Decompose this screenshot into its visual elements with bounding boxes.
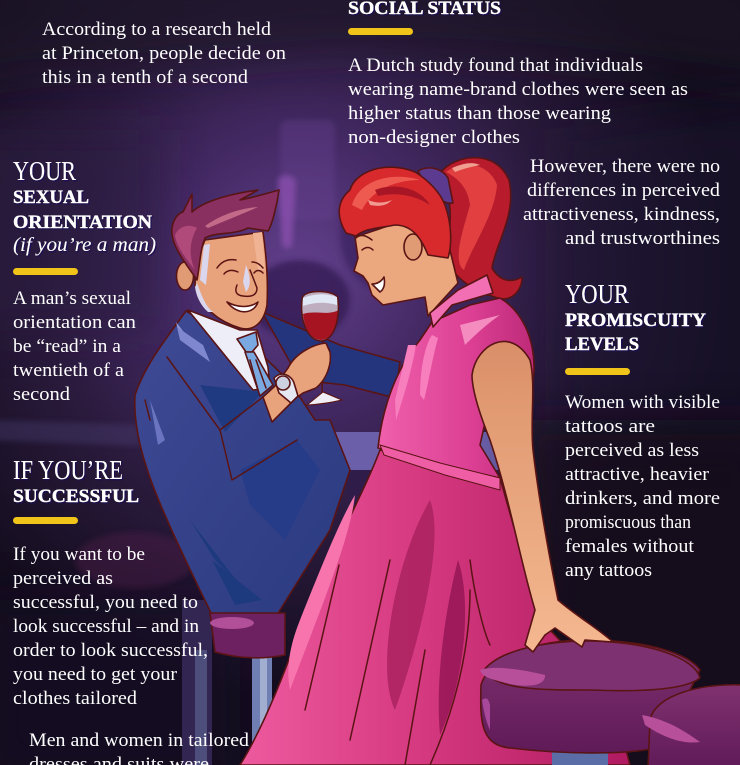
foreground stools bbox=[480, 640, 740, 765]
text: men and women in tailored dresses: Men and women in tailored bbox=[29, 730, 250, 751]
woman's hair front bbox=[339, 167, 451, 258]
text: tailored clothes: order to look successful, bbox=[13, 640, 208, 661]
text: tattoos: perceived as less bbox=[565, 440, 699, 461]
heading: if you're successful: SUCCESSFUL bbox=[13, 486, 139, 507]
text: tattoos bbox=[565, 392, 720, 581]
heading: your promiscuity levels: YOUR bbox=[565, 279, 629, 309]
text: tailored clothes: successful, you need to bbox=[13, 592, 198, 613]
wristwatch bbox=[274, 374, 298, 403]
heading: your sexual orientation bbox=[13, 156, 156, 256]
text: tattoos: any tattoos bbox=[565, 560, 652, 581]
left foreground stool seat bbox=[210, 613, 285, 658]
text: no differences in attractiveness: differences in perceived bbox=[527, 180, 721, 201]
man's hair bbox=[172, 190, 279, 280]
hair band bbox=[418, 168, 453, 203]
skirt folds and shading bbox=[288, 495, 490, 765]
second stool, right edge bbox=[642, 685, 740, 765]
text: no differences in attractiveness: attractiveness, kindness, bbox=[523, 204, 720, 225]
illustration: woman in pink dress bbox=[240, 158, 630, 765]
heading: if you're successful bbox=[13, 455, 139, 507]
text: research at Princeton: at Princeton, people decide on bbox=[42, 43, 287, 64]
heading: your promiscuity levels: LEVELS bbox=[565, 334, 639, 355]
wine glass bbox=[302, 291, 342, 405]
illustration: man with wine glass bbox=[135, 190, 400, 618]
woman's dress bodice bbox=[378, 298, 534, 478]
text: sexual orientation read bbox=[13, 288, 137, 405]
heading: your sexual orientation: YOUR bbox=[13, 156, 76, 186]
hair highlights bbox=[175, 207, 258, 270]
text: research at Princeton bbox=[42, 19, 287, 88]
text: Dutch study: A Dutch study found that individuals bbox=[348, 55, 643, 76]
woman's skirt bbox=[240, 450, 630, 765]
text: sexual orientation read: A man’s sexual bbox=[13, 288, 131, 309]
main stool bbox=[480, 640, 700, 765]
man's hand and forearm bbox=[263, 343, 330, 422]
woman's neck and face bbox=[354, 222, 458, 316]
man's neck and face bbox=[195, 232, 267, 329]
text: tattoos: tattoos are bbox=[565, 416, 655, 437]
text: sexual orientation read: orientation can bbox=[13, 312, 137, 333]
text: sexual orientation read: twentieth of a bbox=[13, 360, 125, 381]
hair highlights bbox=[352, 177, 430, 210]
text: Dutch study: higher status than those wearing bbox=[348, 103, 612, 124]
text: tattoos: drinkers, and more bbox=[565, 488, 720, 509]
heading: your promiscuity levels: PROMISCUITY bbox=[565, 310, 706, 331]
shirt bbox=[188, 310, 270, 390]
cheek highlights bbox=[195, 232, 265, 312]
text: sexual orientation read: be “read” in a bbox=[13, 336, 122, 357]
text: Dutch study: non-designer clothes bbox=[348, 127, 520, 148]
text: no differences in attractiveness: However, there were no bbox=[530, 156, 720, 177]
text: research at Princeton: this in a tenth of a second bbox=[42, 67, 249, 88]
text: Dutch study bbox=[348, 55, 688, 148]
text: tattoos: attractive, heavier bbox=[565, 464, 710, 485]
heading: your promiscuity levels bbox=[565, 279, 706, 355]
text: tailored clothes bbox=[13, 544, 208, 709]
jacket shading and folds bbox=[145, 322, 320, 605]
text: men and women in tailored dresses bbox=[29, 730, 250, 765]
heading: your sexual orientation: ORIENTATION bbox=[13, 212, 152, 233]
woman's face details bbox=[356, 234, 422, 292]
ponytail highlights bbox=[446, 163, 497, 270]
heading: if you're successful: IF YOU’RE bbox=[13, 455, 123, 485]
necktie bbox=[237, 332, 273, 396]
bodice highlights bbox=[380, 315, 500, 490]
woman's collar bbox=[430, 275, 493, 327]
text: tattoos: Women with visible bbox=[565, 392, 720, 413]
man's ear bbox=[176, 262, 194, 290]
heading: your sexual orientation: SEXUAL bbox=[13, 187, 89, 208]
text: tattoos: promiscuous than bbox=[565, 512, 691, 533]
text: no differences in attractiveness: and trustworthines bbox=[565, 228, 720, 249]
ponytail bbox=[441, 158, 522, 299]
text: Dutch study: wearing name-brand clothes were seen as bbox=[348, 79, 688, 100]
man's eyes, nose and smile bbox=[217, 260, 263, 312]
man's suit jacket bbox=[135, 311, 350, 618]
yellow divider: sexual orientation bbox=[13, 268, 78, 275]
text: research at Princeton: According to a research held bbox=[42, 19, 272, 40]
yellow divider: successful bbox=[13, 517, 78, 524]
yellow divider: promiscuity bbox=[565, 368, 630, 375]
yellow divider: social status bbox=[348, 28, 413, 35]
text: tailored clothes: If you want to be bbox=[13, 544, 145, 565]
text: no differences in attractiveness bbox=[523, 156, 721, 249]
text: tailored clothes: look successful – and in bbox=[13, 616, 200, 637]
text: tailored clothes: clothes tailored bbox=[13, 688, 138, 709]
text: tailored clothes: you need to get your bbox=[13, 664, 178, 685]
man's far arm behind the woman bbox=[262, 312, 400, 398]
woman's arm and hand on stool bbox=[472, 341, 613, 652]
text: tattoos: females without bbox=[565, 536, 695, 557]
text: tailored clothes: perceived as bbox=[13, 568, 113, 589]
text: sexual orientation read: second bbox=[13, 384, 71, 405]
heading: your sexual orientation: (if you’re a man) bbox=[13, 234, 156, 256]
left bar stools, dim background bbox=[75, 532, 272, 765]
